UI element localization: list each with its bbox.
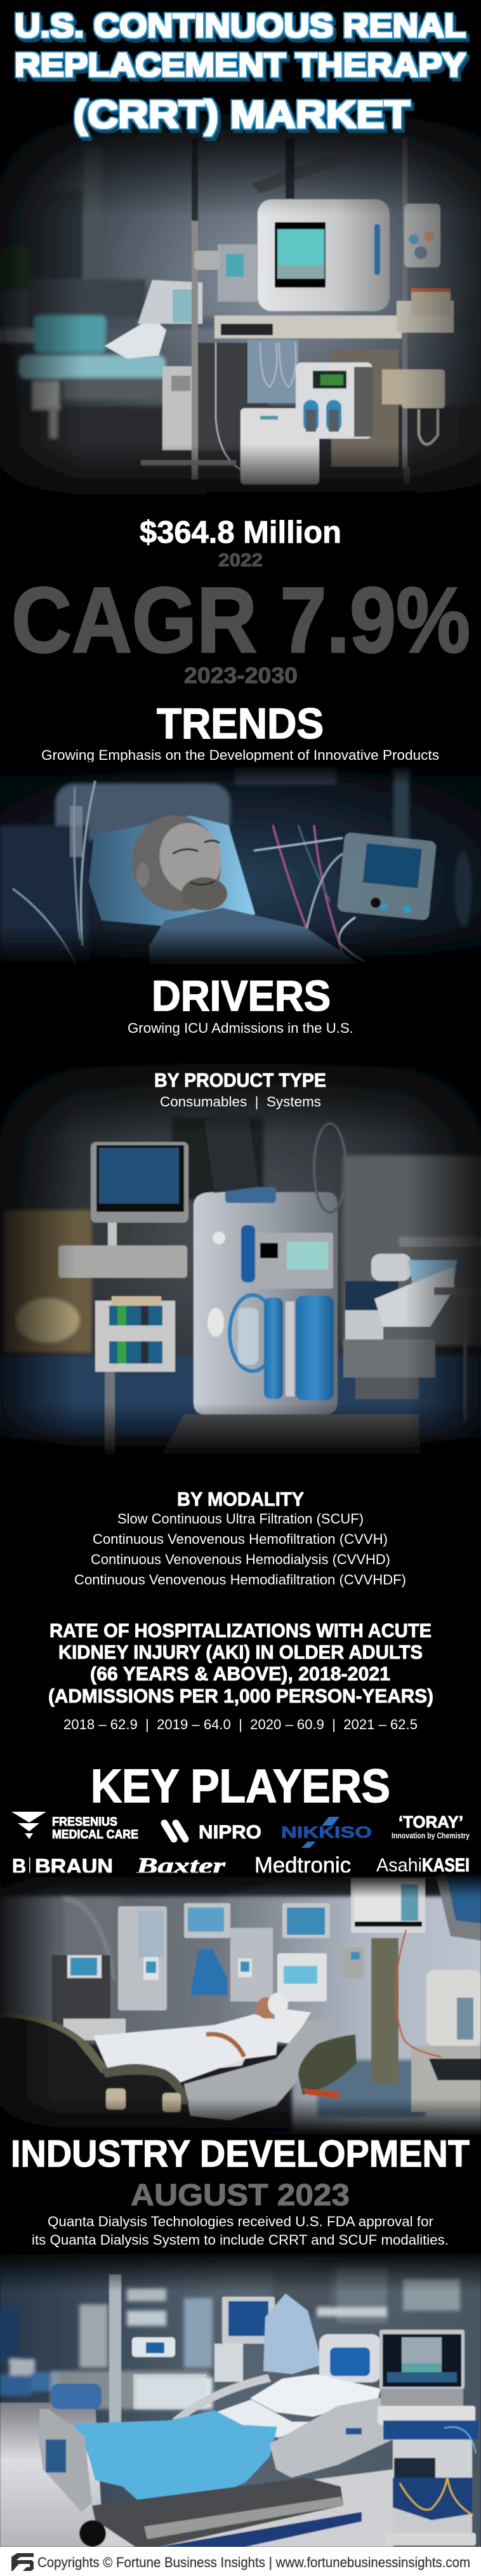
by product type heading: BY PRODUCT TYPE — [154, 1069, 326, 1091]
patient head — [121, 805, 232, 922]
small device and chair — [51, 2337, 206, 2409]
development text: its Quanta Dialysis System to include CRRT and SCUF modalities. — [32, 2232, 449, 2248]
wall monitors — [184, 1873, 481, 1941]
bed back and sheet — [105, 244, 298, 451]
image: patient on CRRT — [0, 762, 481, 984]
logo: Fortune Business Insights — [11, 2553, 34, 2571]
key players heading: KEY PLAYERS — [91, 1760, 390, 1812]
image: bed with dialysis system — [0, 2250, 481, 2547]
logo: Asahi Kasei: Asahi — [376, 1855, 422, 1876]
monitor — [258, 199, 390, 311]
industry development heading: INDUSTRY DEVELOPMENT — [11, 2133, 470, 2175]
hospitalization rate values: 2018 – 62.9 | 2019 – 64.0 | 2020 – 60.9 | 2021 – 62.5 — [63, 1716, 418, 1732]
logo: Medtronic: Medtronic — [254, 1853, 351, 1878]
logo: Nikkiso: NIKKISO — [281, 1824, 372, 1842]
monitor — [379, 2330, 465, 2408]
floor — [0, 2403, 127, 2547]
bed rails — [0, 2012, 357, 2144]
pillow — [89, 816, 255, 930]
right accessory box — [382, 369, 445, 492]
forecast period: 2023-2030 — [184, 663, 298, 688]
trends text: Growing Emphasis on the Development of Innovative Products — [41, 747, 439, 763]
modality list: Continuous Venovenous Hemodialysis (CVVHD) — [91, 1551, 390, 1567]
logo: Nikkiso — [281, 1817, 372, 1848]
patient on bed — [93, 1993, 338, 2120]
dialysis cart — [378, 2406, 478, 2546]
bed pillow and headboard — [250, 2334, 381, 2417]
logo: Fresenius Medical Care: MEDICAL CARE — [52, 1828, 138, 1842]
development text: Quanta Dialysis Technologies received U.S. FDA approval for — [48, 2214, 433, 2229]
clinician in blue — [190, 1949, 227, 1995]
development text — [32, 2214, 449, 2248]
pump unit — [296, 362, 373, 439]
market size value: $364.8 Million — [140, 515, 341, 550]
image: CRRT machine in hospital room — [0, 105, 481, 530]
white sheet and near rail — [173, 2374, 317, 2438]
title: REPLACEMENT THERAPY — [15, 47, 466, 84]
hospitalization rate heading: (66 YEARS & ABOVE), 2018-2021 — [90, 1663, 390, 1685]
fluid bags and tubing — [230, 1295, 334, 1400]
cart shelf — [58, 1245, 187, 1278]
drivers heading: DRIVERS — [152, 972, 331, 1020]
modality list — [74, 1511, 406, 1588]
logo: Baxter: Baxter — [136, 1853, 226, 1878]
logo: Nipro: NIPRO — [199, 1822, 261, 1843]
beige column — [331, 350, 399, 467]
image: CRRT system in ICU — [0, 1051, 481, 1482]
monitor device — [337, 832, 437, 920]
logo: Asahi Kasei — [376, 1855, 470, 1876]
monitor — [91, 1142, 188, 1261]
bed — [343, 1254, 457, 1399]
main machine — [194, 1115, 346, 1414]
tubing — [216, 343, 296, 470]
machine screen — [241, 1225, 333, 1289]
hospitalization rate heading: (ADMISSIONS PER 1,000 PERSON-YEARS) — [48, 1685, 433, 1707]
title: (CRRT) MARKET — [74, 93, 410, 136]
upper right device — [404, 204, 440, 267]
arm and pole — [192, 138, 407, 479]
hospitalization rate heading — [48, 1619, 433, 1707]
base year: 2022 — [218, 550, 263, 571]
modality list: Continuous Venovenous Hemodiafiltration (CVVHDF) — [74, 1572, 406, 1588]
logo: Toray — [392, 1812, 470, 1840]
logo: B. Braun: B — [12, 1855, 26, 1878]
bed rails — [38, 2398, 393, 2512]
product types: Consumables | Systems — [160, 1094, 321, 1110]
tubes — [13, 781, 365, 978]
equipment — [52, 1906, 481, 2112]
footer bar — [0, 2547, 481, 2576]
logo: Asahi Kasei: KASEI — [422, 1855, 470, 1876]
white box unit — [240, 408, 319, 484]
drivers text: Growing ICU Admissions in the U.S. — [128, 1020, 353, 1036]
title: U.S. CONTINUOUS RENAL — [15, 8, 466, 44]
side table — [400, 1238, 481, 1422]
shirt — [149, 908, 374, 974]
title — [15, 8, 466, 136]
development date: AUGUST 2023 — [131, 2179, 350, 2212]
center monitor and bag — [214, 2294, 322, 2382]
image: ICU ward with patient — [0, 1873, 481, 2152]
logo: Fresenius Medical Care — [11, 1812, 138, 1842]
bed base and wheel — [79, 2478, 362, 2547]
base — [141, 460, 416, 510]
modality list: Continuous Venovenous Hemofiltration (CVVH) — [93, 1531, 388, 1547]
hospitalization rate heading: KIDNEY INJURY (AKI) IN OLDER ADULTS — [58, 1641, 423, 1663]
logo: Fresenius Medical Care: FRESENIUS — [52, 1816, 117, 1829]
trends heading: TRENDS — [157, 700, 324, 748]
pole — [109, 2274, 121, 2423]
machine base — [162, 1414, 420, 1454]
shelf — [214, 288, 454, 338]
hospitalization rate heading: RATE OF HOSPITALIZATIONS WITH ACUTE — [49, 1619, 432, 1642]
blue sheet — [74, 2410, 277, 2506]
by modality heading: BY MODALITY — [177, 1488, 304, 1510]
modality list: Slow Continuous Ultra Filtration (SCUF) — [117, 1511, 364, 1527]
logo: Nipro — [164, 1822, 261, 1843]
logo: Toray: ‘TORAY’ — [399, 1812, 463, 1831]
logo: B. Braun: BRAUN — [35, 1855, 113, 1878]
cart basket — [95, 1296, 175, 1454]
